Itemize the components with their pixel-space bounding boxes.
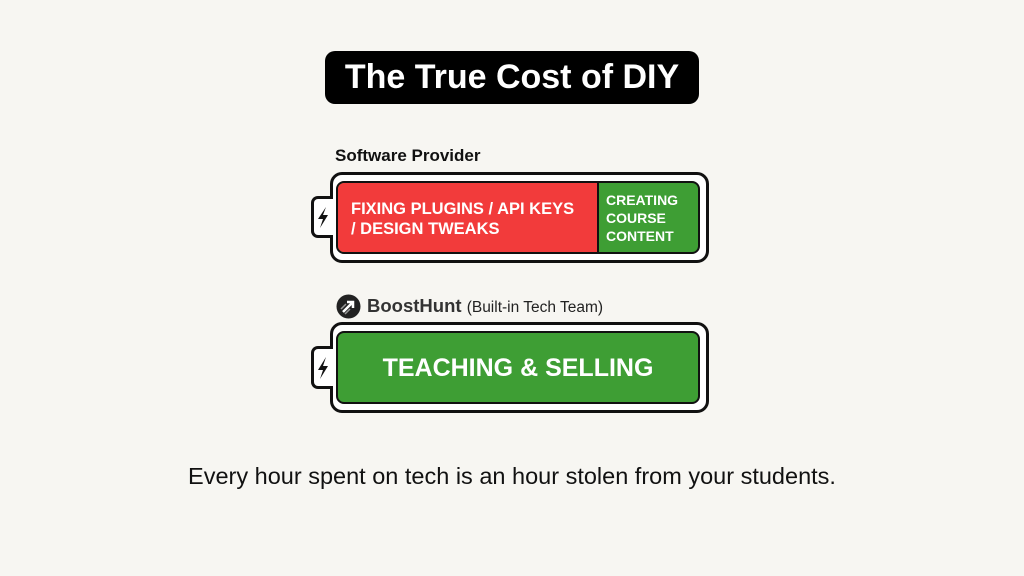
title: The True Cost of DIY bbox=[345, 58, 679, 96]
text: fixing plugins bbox=[351, 200, 574, 238]
text: creating course content: CONTENT bbox=[606, 228, 674, 244]
battery terminal bbox=[311, 346, 333, 389]
text: creating course content: CREATING bbox=[606, 192, 678, 208]
bar: red segment bbox=[336, 181, 700, 254]
caption: Every hour spent on tech is an hour stolen from your students. bbox=[188, 463, 836, 489]
title bbox=[325, 51, 699, 104]
battery terminal bbox=[311, 196, 333, 238]
text: creating course content bbox=[606, 192, 678, 244]
text: fixing plugins: / DESIGN TWEAKS bbox=[351, 220, 500, 238]
label: Software Provider: Software Provider bbox=[335, 146, 480, 165]
text: fixing plugins: FIXING PLUGINS / API KEYS bbox=[351, 200, 574, 218]
icon: BoostHunt logo bbox=[336, 294, 360, 318]
label: BoostHunt: BoostHunt (Built-in Tech Team) bbox=[367, 295, 603, 316]
bar: teaching & selling bbox=[336, 331, 700, 404]
battery: boosthunt bbox=[311, 322, 709, 413]
bar: teaching & selling: TEACHING & SELLING bbox=[383, 354, 653, 382]
battery: software provider bbox=[311, 172, 709, 263]
text: creating course content: COURSE bbox=[606, 210, 666, 226]
